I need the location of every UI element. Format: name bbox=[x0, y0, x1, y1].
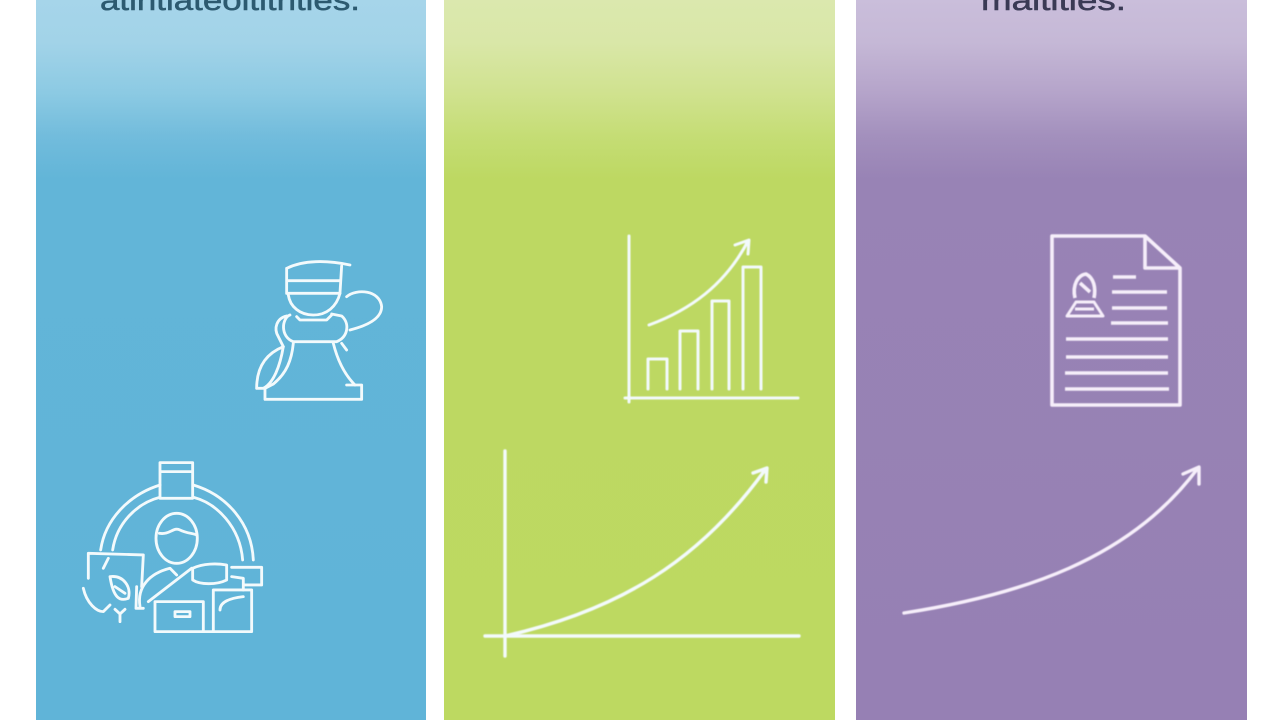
panel: blue bbox=[36, 0, 426, 720]
panel: green bbox=[444, 0, 835, 720]
arrow: rising curve bbox=[904, 467, 1199, 613]
icon: worker with cap bbox=[257, 262, 382, 399]
icon: document with profile bbox=[1052, 236, 1180, 405]
chart: growth curve bbox=[485, 451, 799, 656]
icon: person with boxes under an arch bbox=[83, 463, 262, 632]
panel: purple bbox=[856, 0, 1247, 720]
icon: bar chart with rising arrow bbox=[625, 236, 798, 402]
